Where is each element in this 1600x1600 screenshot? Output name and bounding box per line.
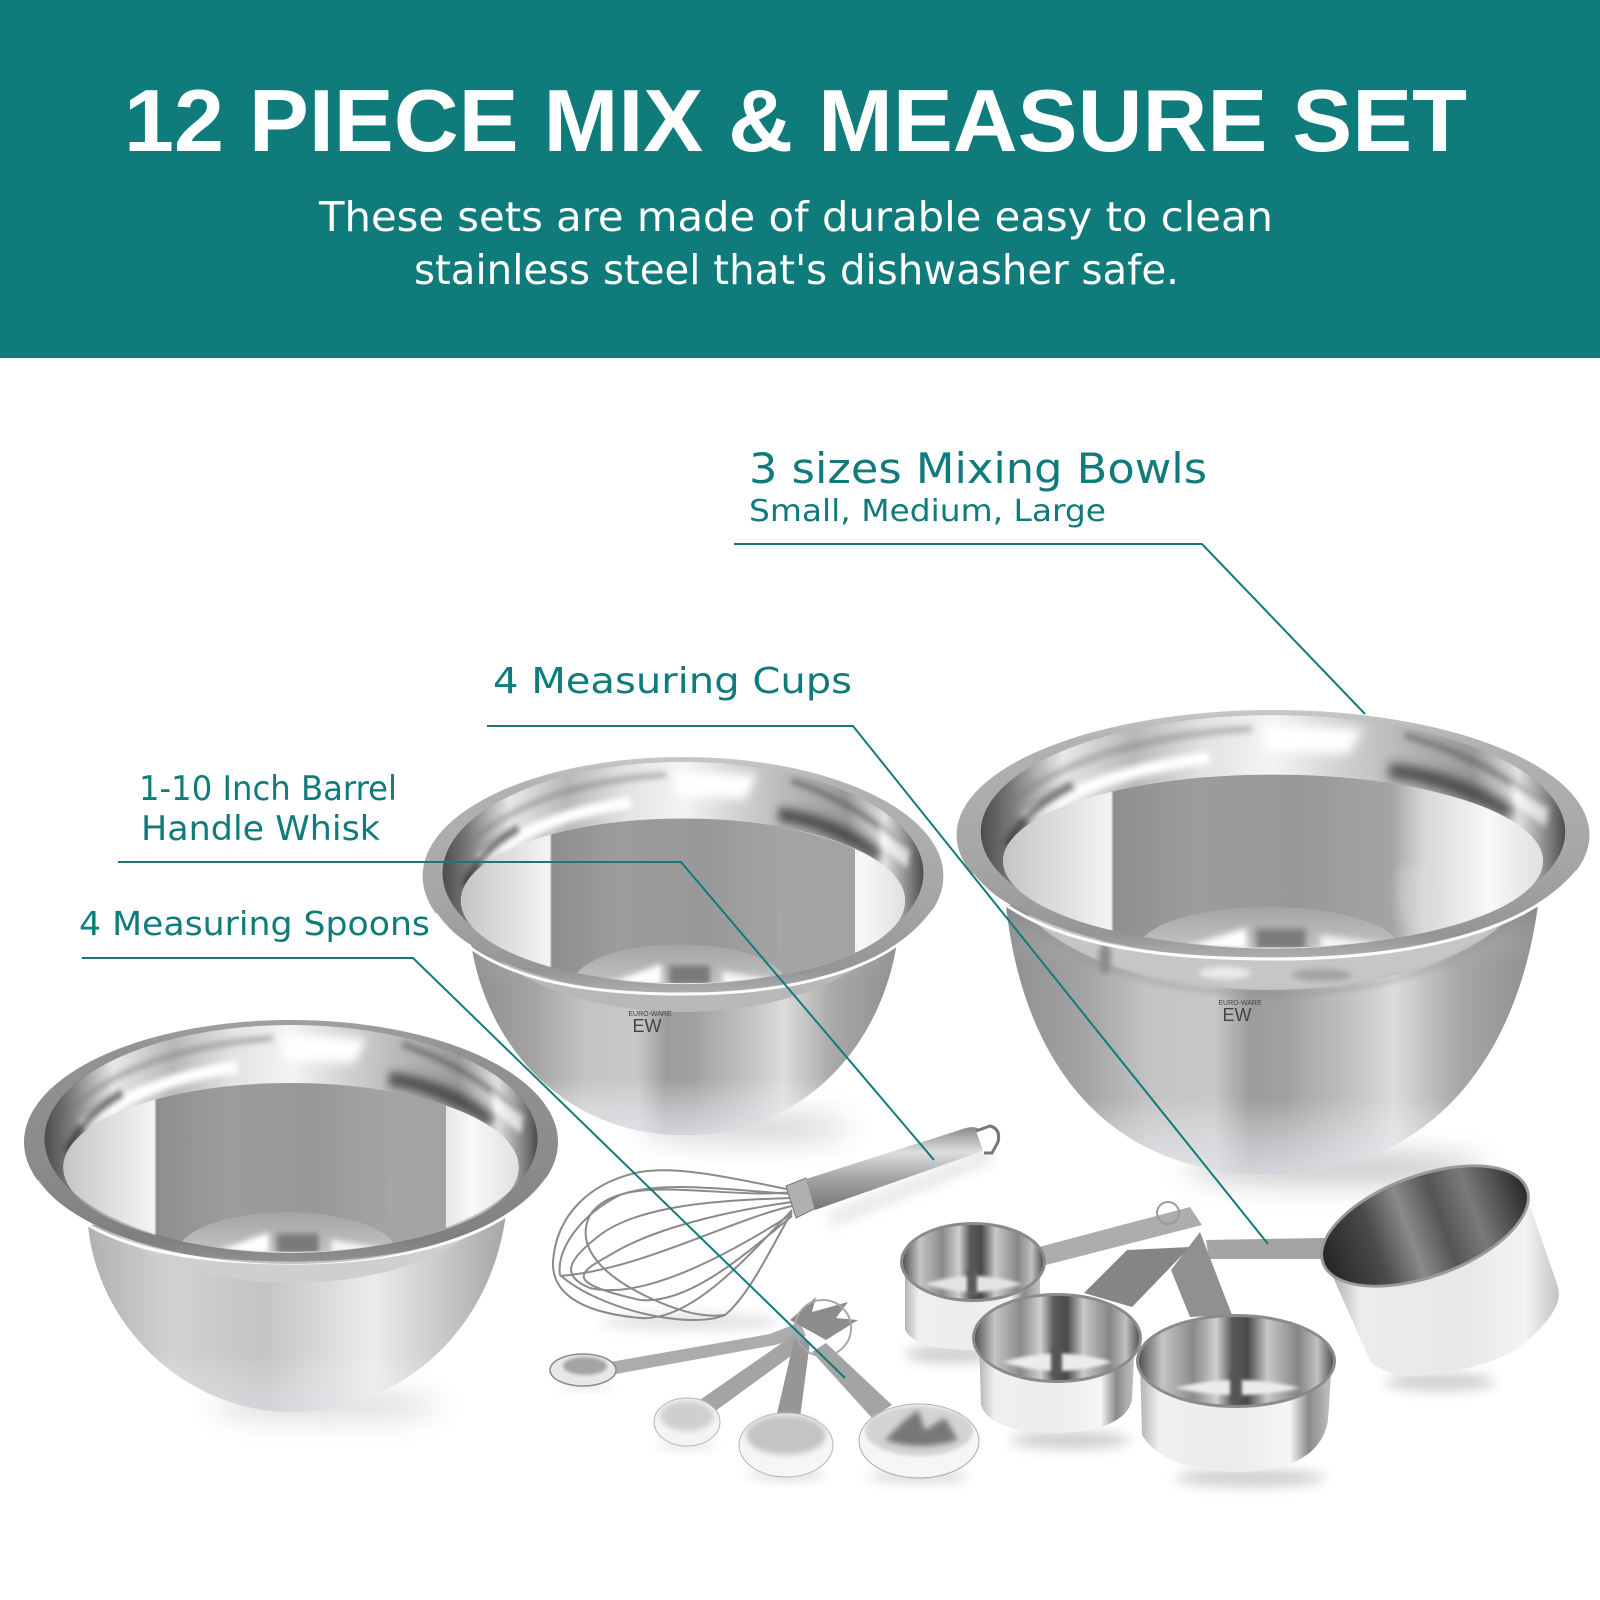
cup ring <box>1157 1202 1179 1224</box>
header banner <box>0 0 1600 358</box>
callout leader lines <box>82 544 1365 1378</box>
whisk collar <box>786 1178 816 1218</box>
brand mark: EURO-WARE <box>628 1011 672 1018</box>
cup: smallest <box>900 1222 1046 1350</box>
callout: measuring cups: 4 Measuring Cups <box>493 661 852 702</box>
title: 12 PIECE MIX & MEASURE SET <box>124 71 1467 170</box>
leader: whisk <box>118 862 934 1160</box>
cup: third <box>1136 1314 1336 1472</box>
cup shadows <box>905 1345 1495 1487</box>
callout: mixing bowls <box>749 444 1207 529</box>
measuring cups <box>900 1140 1559 1487</box>
medium mixing bowl <box>423 757 943 1141</box>
brand mark: EW <box>1222 1005 1252 1025</box>
brand mark <box>1218 1000 1262 1025</box>
large mixing bowl <box>956 710 1590 1184</box>
leader: mixing bowls <box>734 544 1365 714</box>
small mixing bowl <box>24 1020 558 1418</box>
whisk handle <box>806 1127 988 1210</box>
measuring spoons <box>550 1297 979 1483</box>
brand mark <box>628 1011 672 1036</box>
spoon bowls <box>550 1354 616 1386</box>
callout: mixing bowls: 3 sizes Mixing Bowls <box>749 444 1207 493</box>
hanging ring <box>976 1126 999 1153</box>
subtitle: stainless steel that's dishwasher safe. <box>414 246 1179 294</box>
leader: measuring spoons <box>82 958 845 1378</box>
subtitle: These sets are made of durable easy to clean <box>318 193 1273 241</box>
callout: whisk: Handle Whisk <box>141 809 380 849</box>
cup: second <box>972 1293 1142 1433</box>
callout: whisk <box>139 769 397 849</box>
leader: measuring cups <box>487 726 1268 1244</box>
whisk wires <box>553 1170 792 1320</box>
whisk <box>553 1126 999 1330</box>
cup handles <box>1206 1238 1325 1259</box>
brand mark: EURO-WARE <box>1218 1000 1262 1007</box>
spoon handles <box>610 1297 892 1418</box>
callout: whisk: 1-10 Inch Barrel <box>139 769 397 809</box>
callout: mixing bowls: Small, Medium, Large <box>749 494 1106 529</box>
callout: measuring spoons: 4 Measuring Spoons <box>79 904 430 943</box>
subtitle <box>318 193 1273 294</box>
reflections under rim <box>1099 942 1352 981</box>
brand mark: EW <box>632 1016 662 1036</box>
cup: largest <box>1304 1140 1559 1376</box>
